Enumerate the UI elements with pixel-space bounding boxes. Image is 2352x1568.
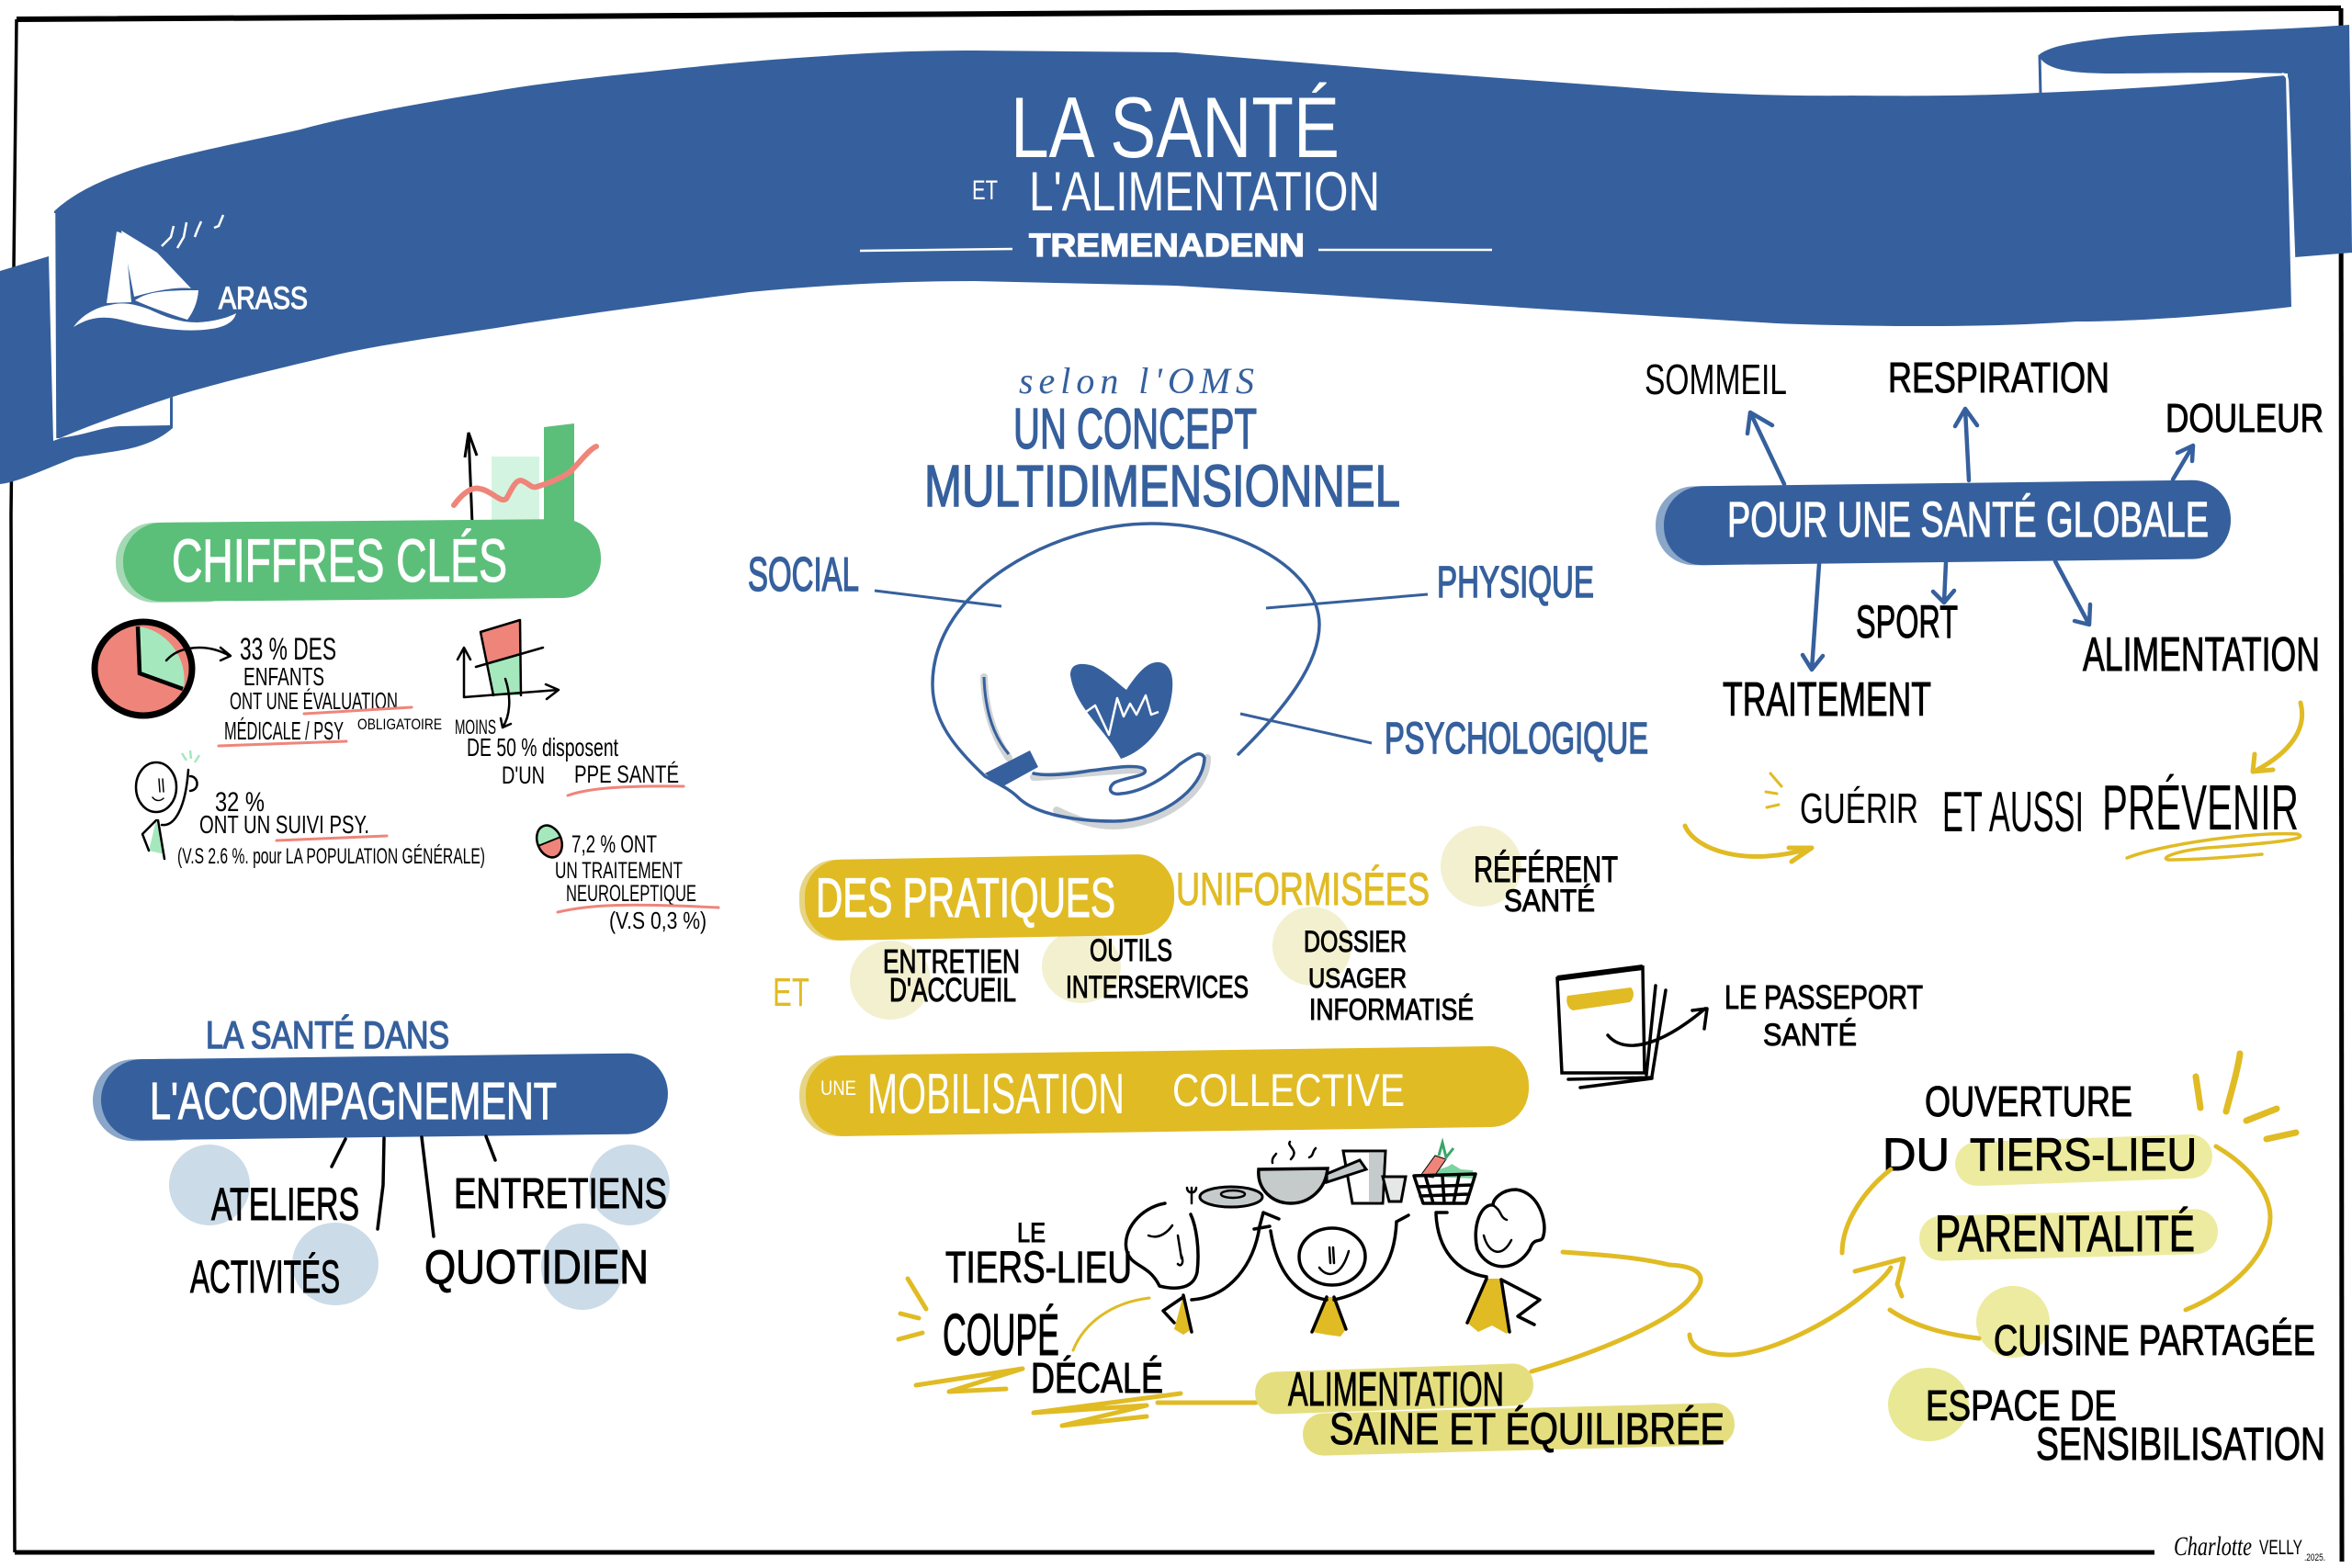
yellow scribbles and rays	[899, 1279, 1256, 1426]
labels: OUVERTURE	[1925, 1077, 2132, 1125]
items: D'ACCUEIL	[889, 971, 1016, 1009]
heading pill	[92, 1053, 669, 1142]
stat: 33%	[219, 632, 442, 746]
labels	[190, 1169, 667, 1303]
stat: 7,2%: (V.S 0,3 %)	[609, 907, 707, 934]
heading: UN CONCEPT	[1013, 398, 1257, 461]
dimension labels: PSYCHOLOGIQUE	[1385, 715, 1648, 763]
text: le tiers-lieu coupé décalé: TIERS-LIEU	[945, 1244, 1132, 1292]
icon: hand holding heart inside circle	[933, 524, 1319, 826]
title: L'ALIMENTATION	[1029, 161, 1380, 222]
title	[860, 79, 1492, 264]
highlight labels: alimentation saine	[1254, 1363, 1736, 1456]
text: guérir et aussi prévenir	[1800, 772, 2299, 844]
panel: chiffres clés	[95, 423, 718, 934]
stat: moins de 50%: DE 50 % disposent	[467, 733, 618, 761]
stat: moins de 50%: PPE SANTÉ	[574, 761, 679, 788]
stat: 7,2%: UN TRAITEMENT	[555, 858, 683, 884]
heading end: UNIFORMISÉES	[1176, 863, 1430, 915]
logo name: ARASS	[219, 281, 308, 316]
person middle	[1271, 1215, 1408, 1337]
dimension labels: PHYSIQUE	[1437, 558, 1594, 607]
subheading: LA SANTÉ DANS	[206, 1013, 449, 1056]
yellow loop lines	[1842, 1146, 2270, 1338]
text: le tiers-lieu coupé décalé: DÉCALÉ	[1031, 1354, 1163, 1402]
label: passeport	[1724, 978, 1923, 1053]
yellow arrows and underline	[1685, 703, 2302, 862]
heading pill: UNE	[820, 1077, 856, 1100]
pie chart: 33%	[95, 622, 231, 716]
background circles	[169, 1145, 670, 1310]
background circles	[850, 826, 1521, 1020]
highlights	[1888, 1134, 2219, 1441]
heading pill	[1656, 479, 2232, 566]
items	[773, 849, 1618, 1026]
stat: 33%: ENFANTS	[243, 662, 324, 691]
stat: 33%: ONT UNE ÉVALUATION	[230, 687, 398, 715]
panel: pour une santé globale	[1645, 354, 2324, 727]
person left	[1125, 1203, 1279, 1335]
arrows	[1747, 409, 2193, 670]
person right	[1436, 1190, 1544, 1334]
items: RÉFÉRENT	[1474, 849, 1618, 890]
stat: 33%: MÉDICALE / PSY	[224, 716, 344, 745]
label: passeport: LE PASSEPORT	[1724, 978, 1923, 1016]
items: SANTÉ	[1504, 884, 1595, 919]
table items	[1187, 1142, 1476, 1207]
labels: ESPACE DE	[1926, 1382, 2117, 1429]
heading pill: COLLECTIVE	[1172, 1065, 1405, 1116]
icon: medicine capsule	[532, 821, 567, 862]
panel: ouverture du tiers-lieu	[1842, 1054, 2325, 1470]
panel: la santé dans l'accompagnement	[92, 1013, 670, 1310]
flow arrows	[1532, 1252, 1904, 1371]
stat: 32%	[177, 787, 485, 869]
labels	[1645, 354, 2324, 727]
heading pill: DES PRATIQUES	[816, 867, 1115, 929]
items: DOSSIER	[1304, 925, 1407, 958]
stat: 7,2%	[555, 830, 718, 934]
rays	[2196, 1054, 2296, 1139]
connector lines	[875, 591, 1428, 743]
labels: ACTIVITÉS	[190, 1251, 340, 1303]
stat: 7,2%: 7,2 % ONT	[571, 830, 657, 858]
signature: Charlotte	[2174, 1531, 2252, 1562]
stat: 7,2%: NEUROLEPTIQUE	[566, 881, 696, 907]
labels: PARENTALITÉ	[1935, 1204, 2195, 1262]
stat: 32%: ONT UN SUIVI PSY.	[199, 810, 369, 839]
banner ribbon	[0, 25, 2352, 484]
highlight labels: alimentation saine: SAINE ET ÉQUILIBRÉE	[1329, 1405, 1724, 1454]
stat: 33%: 33 % DES	[240, 632, 336, 667]
text: guérir et aussi prévenir: ET AUSSI	[1942, 781, 2084, 844]
items: INFORMATISÉ	[1309, 993, 1474, 1026]
heading pill	[798, 853, 1175, 942]
heading pill	[798, 1045, 1530, 1137]
text: guérir et aussi prévenir: GUÉRIR	[1800, 784, 1918, 832]
title: ET	[972, 175, 998, 206]
items: OUTILS	[1090, 933, 1172, 968]
items: ENTRETIEN	[883, 942, 1020, 980]
labels: DU	[1883, 1129, 1950, 1180]
heading pill: MOBILISATION	[867, 1063, 1125, 1126]
panel: pratiques uniformisées	[773, 826, 1618, 1026]
heading pill	[116, 519, 601, 603]
text: le tiers-lieu coupé décalé: COUPÉ	[943, 1302, 1059, 1368]
labels	[1883, 1077, 2325, 1470]
heading: MULTIDIMENSIONNEL	[924, 453, 1400, 519]
labels: TRAITEMENT	[1723, 673, 1931, 727]
dimension labels: SOCIAL	[748, 548, 859, 602]
title: LA SANTÉ	[1011, 79, 1340, 175]
chart icon above heading	[454, 423, 596, 525]
labels: RESPIRATION	[1888, 354, 2109, 401]
highlight labels: alimentation saine: ALIMENTATION	[1288, 1363, 1504, 1416]
illustration: people sharing a meal	[1125, 1142, 1544, 1337]
text: le tiers-lieu coupé décalé: LE	[1017, 1218, 1046, 1248]
text: le tiers-lieu coupé décalé	[943, 1218, 1163, 1402]
bar icon: moins de 50%	[458, 620, 559, 728]
stat: moins de 50%	[455, 716, 684, 795]
dimension labels	[748, 548, 1648, 763]
heading pill: CHIFFRES CLÉS	[172, 526, 507, 594]
items: USAGER	[1308, 964, 1407, 994]
icon: ARASS sailboat logo	[74, 215, 236, 331]
stat: 32%: (V.S 2.6 %. pour LA POPULATION GÉNÉRALE)	[177, 844, 485, 869]
panel: mobilisation collective	[798, 1045, 1904, 1456]
label: passeport: SANTÉ	[1763, 1018, 1857, 1053]
panel: concept multidimensionnel	[748, 360, 1648, 826]
connector lines	[332, 1136, 495, 1236]
stat: 33%: OBLIGATOIRE	[357, 716, 442, 733]
signature: VELLY	[2259, 1536, 2302, 1559]
labels: SPORT	[1856, 596, 1958, 648]
icon: person raising hand	[136, 750, 199, 859]
labels: ATELIERS	[211, 1179, 359, 1230]
stat: moins de 50%: D'UN	[502, 761, 545, 789]
stat: 32%: 32 %	[215, 787, 265, 818]
heading	[924, 360, 1400, 519]
labels: QUOTIDIEN	[424, 1241, 649, 1294]
heading: selon l'OMS	[1019, 360, 1254, 401]
labels: TIERS-LIEU	[1970, 1129, 2197, 1180]
stat: moins de 50%: MOINS	[455, 716, 496, 739]
items: INTERSERVICES	[1066, 970, 1249, 1005]
signature: .2025.	[2304, 1552, 2325, 1563]
items: ET	[773, 970, 809, 1015]
labels: SOMMEIL	[1645, 355, 1787, 403]
heading pill: L'ACCOMPAGNEMENT	[150, 1072, 557, 1131]
icon: passeport santé book	[1557, 967, 1707, 1088]
labels: ENTRETIENS	[454, 1169, 667, 1217]
signature	[2174, 1531, 2325, 1563]
title: TREMENADENN	[1029, 228, 1305, 264]
